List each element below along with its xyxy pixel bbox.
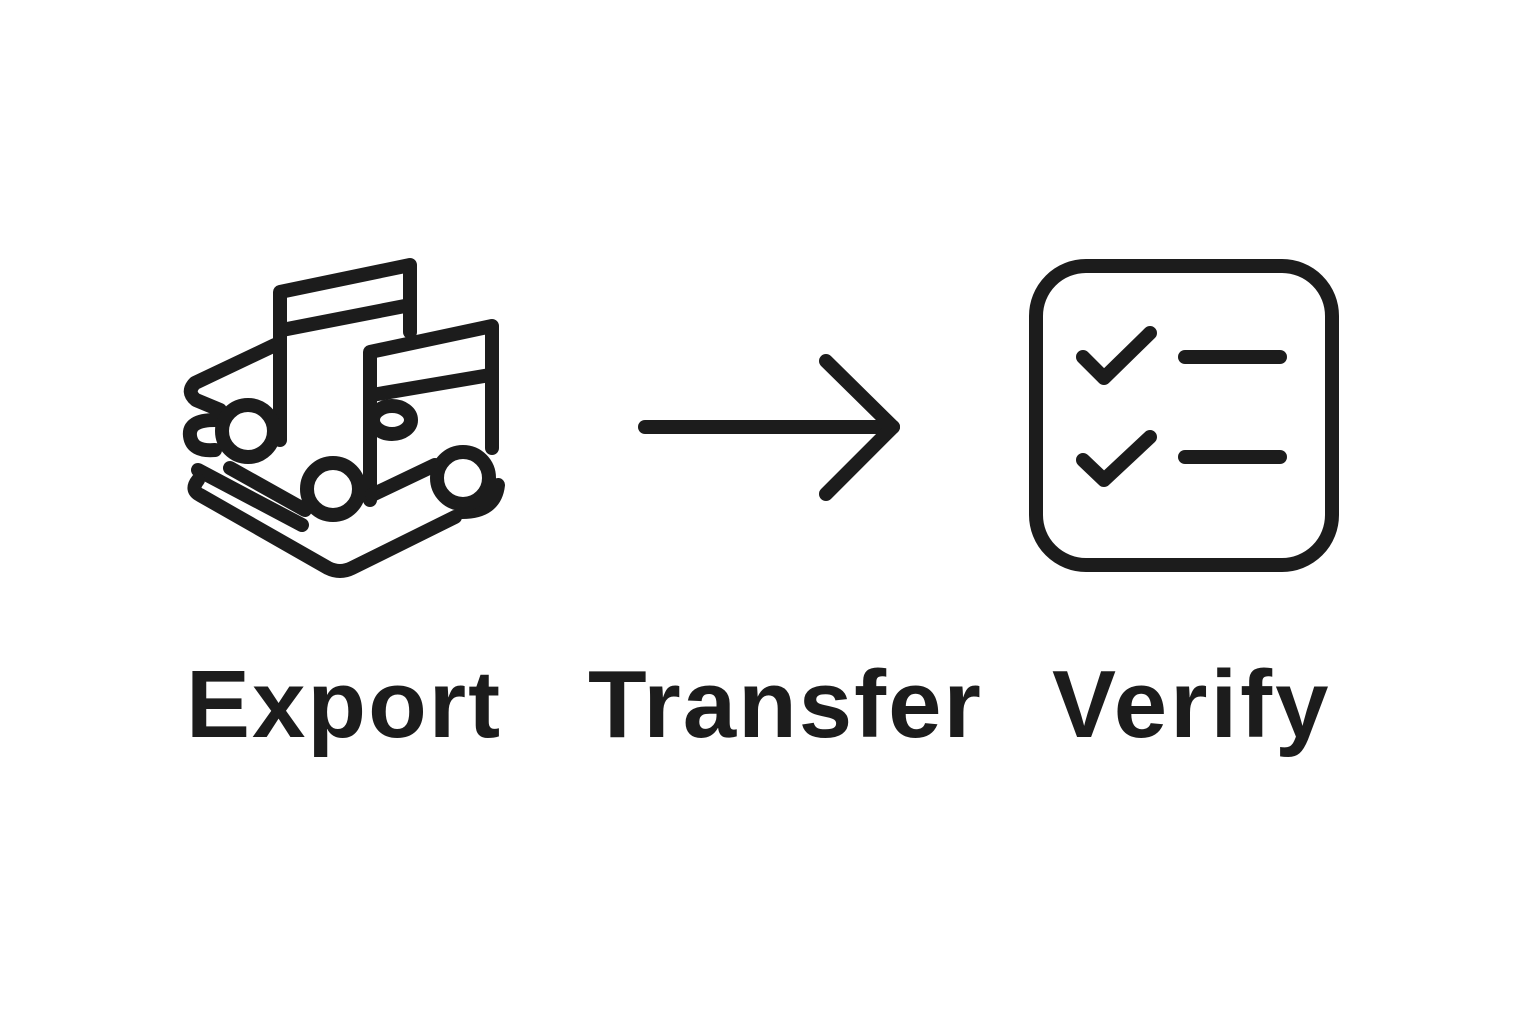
icon: checklist xyxy=(1036,266,1332,565)
icon: export (music files) xyxy=(190,265,498,571)
arrow xyxy=(645,361,893,494)
label: Export: Export xyxy=(186,651,502,758)
label: Transfer: Transfer xyxy=(588,651,983,758)
label: Verify: Verify xyxy=(1052,651,1332,758)
